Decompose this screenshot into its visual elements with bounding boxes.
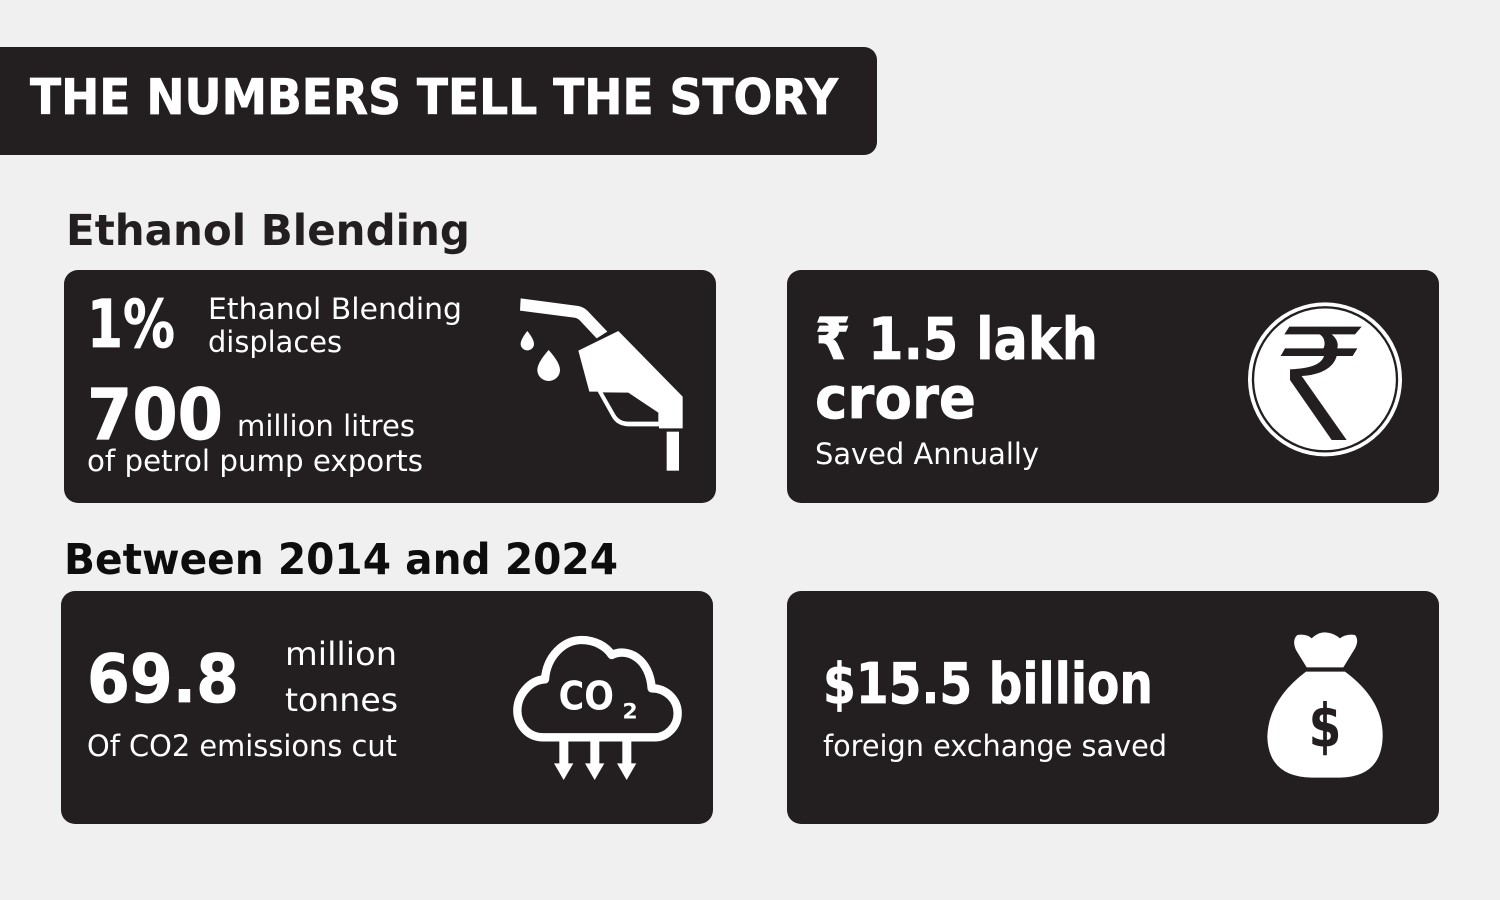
text: Ethanol Blending displaces — [208, 292, 462, 359]
text: foreign exchange saved: foreign exchange saved — [823, 729, 1167, 763]
text: million tonnes: tonnes — [285, 681, 398, 719]
stat: 1.5 lakh crore — [815, 305, 1098, 432]
text: Saved Annually: Saved Annually — [815, 437, 1039, 471]
text: million tonnes — [285, 635, 398, 719]
icon: money bag — [1267, 632, 1383, 778]
panel: CO2 emissions — [61, 591, 713, 824]
icon: CO2 cloud: CO — [559, 674, 614, 720]
text: million tonnes: million — [285, 635, 397, 673]
heading: Ethanol Blending: Ethanol Blending — [66, 206, 470, 256]
stat: $15.5 billion: $15.5 billion — [823, 652, 1153, 717]
panel: annual savings — [787, 270, 1439, 503]
title banner: THE NUMBERS TELL THE STORY — [30, 69, 838, 126]
panel: ethanol blending displacement — [64, 270, 716, 503]
icon: fuel nozzle — [520, 298, 683, 471]
text: Of CO2 emissions cut: Of CO2 emissions cut — [87, 729, 397, 763]
text: of petrol pump exports: of petrol pump exports — [87, 444, 423, 478]
stat: 700: 700 — [87, 374, 223, 456]
stat: 1%: 1% — [87, 286, 175, 363]
text: million litres: million litres — [237, 409, 415, 443]
stat: 69.8: 69.8 — [87, 640, 239, 718]
icon: rupee coin — [1248, 302, 1402, 456]
icon: money bag: $ — [1309, 691, 1341, 760]
heading: Between 2014 and 2024: Between 2014 and 2024 — [64, 535, 618, 585]
text: Ethanol Blending displaces: displaces — [208, 325, 342, 359]
stat: 1.5 lakh crore: ₹ 1.5 lakh — [815, 305, 1098, 373]
icon: CO2 cloud — [517, 640, 678, 780]
stat: 1.5 lakh crore: crore — [815, 364, 976, 432]
panel: foreign exchange — [787, 591, 1439, 824]
title banner — [0, 47, 877, 155]
icon: CO2 cloud: 2 — [622, 700, 638, 725]
text: Ethanol Blending displaces: Ethanol Blending — [208, 292, 462, 326]
